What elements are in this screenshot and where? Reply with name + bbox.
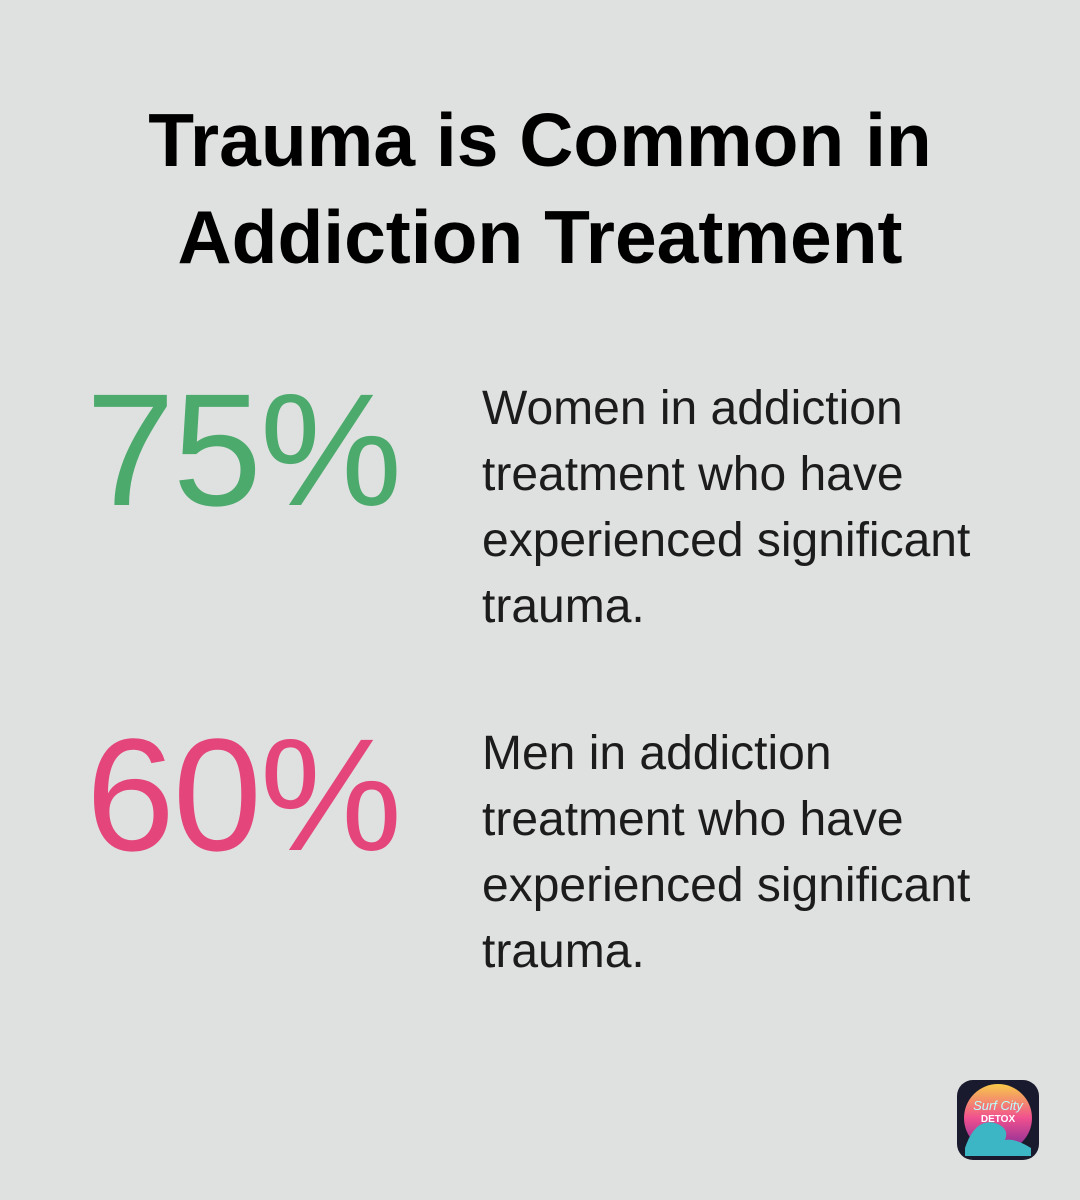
number 60%: 60% — [86, 705, 400, 884]
description women: Women in addiction — [482, 382, 903, 435]
description women: treatment who have — [482, 448, 904, 501]
description women — [482, 382, 970, 633]
stat: women — [86, 360, 970, 633]
description men — [482, 727, 970, 978]
logo: Surf City — [973, 1098, 1024, 1113]
description men: trauma. — [482, 925, 645, 978]
stat: men — [86, 705, 970, 978]
number 75%: 75% — [86, 360, 400, 539]
title: Trauma is Common in — [148, 98, 932, 182]
description men: experienced significant — [482, 859, 970, 912]
description men: treatment who have — [482, 793, 904, 846]
description women: experienced significant — [482, 514, 970, 567]
description women: trauma. — [482, 580, 645, 633]
title — [148, 98, 932, 279]
title: Addiction Treatment — [177, 195, 903, 279]
logo: DETOX — [981, 1114, 1015, 1125]
logo — [957, 1080, 1039, 1160]
description men: Men in addiction — [482, 727, 832, 780]
